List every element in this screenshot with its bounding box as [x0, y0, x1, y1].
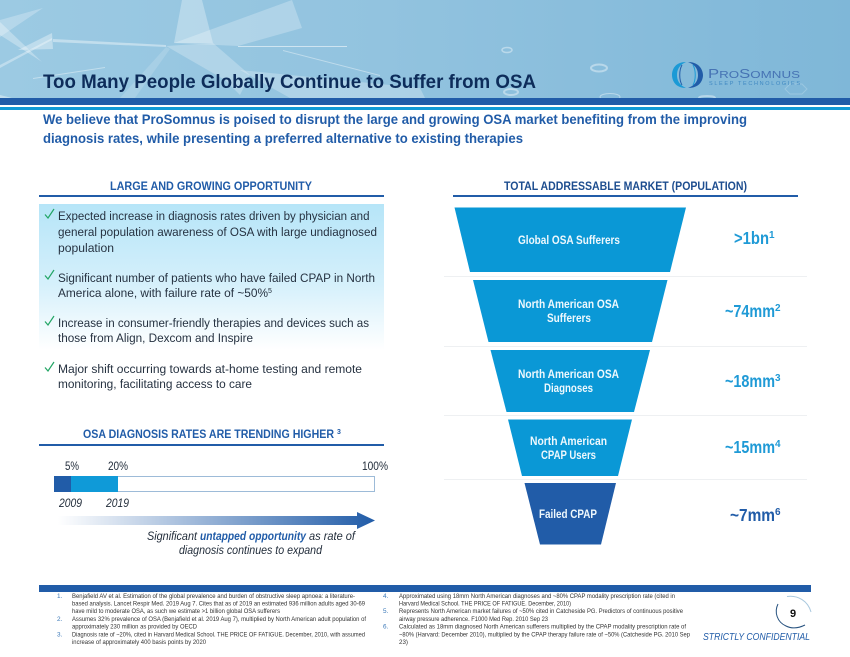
- footnotes: left column: 3.: [57, 632, 63, 638]
- funnel tier: failed CPAP: [524, 483, 616, 544]
- bullet 1: population: [58, 241, 114, 255]
- footnotes: right column: 5.: [383, 608, 389, 615]
- bullet 2: 5: [268, 288, 272, 295]
- bullet 3: Increase in consumer-friendly therapies and devices such as: [58, 316, 369, 330]
- caption: Significant: [147, 531, 198, 543]
- footnotes: right column: Represents North American market failures of ~50% cited in Catcheside PG. Predictors of continuous positive: [399, 608, 683, 615]
- funnel tier: global: Global OSA Sufferers: [518, 235, 620, 247]
- year labels: [58, 496, 129, 510]
- value: North American sufferers: 2: [775, 303, 781, 314]
- footnotes: left column: 2.: [57, 616, 63, 623]
- bullet 2: Significant number of patients who have failed CPAP in North: [58, 271, 375, 285]
- funnel tier: North American sufferers: [473, 280, 668, 342]
- logo: SLEEP TECHNOLOGIES: [709, 81, 800, 87]
- arrow: [58, 512, 375, 529]
- bullet 4: Major shift occurring towards at-home testing and remote: [58, 362, 362, 376]
- caption: diagnosis continues to expand: [179, 545, 323, 557]
- funnel tier: North American sufferers: North American OSA: [518, 299, 619, 311]
- section heading: diagnosis rates: 3: [337, 429, 341, 436]
- percent labels: [65, 459, 388, 473]
- value: failed CPAP: ~7mm: [730, 505, 775, 525]
- section heading: opportunity: LARGE AND GROWING OPPORTUNITY: [110, 179, 312, 193]
- funnel tier: diagnoses: North American OSA: [518, 369, 619, 381]
- percent labels: 20%: [108, 459, 128, 473]
- footnotes: left column: 1.: [57, 593, 63, 600]
- value: North American sufferers: ~74mm: [725, 301, 775, 321]
- value: global: >1bn: [734, 228, 769, 248]
- funnel tier: failed CPAP: Failed CPAP: [539, 509, 597, 521]
- footnotes: right column: 4.: [383, 593, 389, 600]
- footnotes: right column: Harvard Medical School. THE PRICE OF FATIGUE. December, 2010): [399, 600, 571, 608]
- page number badge: 9: [790, 608, 796, 620]
- logo: P RO S OMNUS: [708, 67, 800, 81]
- percent labels: 100%: [362, 459, 388, 473]
- footnotes: left column: have mild to moderate OSA, as such we estimate >1 billion global OSA sufferers: [72, 608, 280, 615]
- percent labels: 5%: [65, 459, 79, 473]
- value: diagnoses: ~18mm: [725, 371, 775, 391]
- footnotes: left column: Assumes 32% prevalence of OSA (Benjafield et al. 2019 Aug 7), multiplied by North American adult population of: [72, 616, 366, 623]
- footnotes: right column: airway pressure adherence. F1000 Med Rep. 2010 Sep 23: [399, 616, 548, 623]
- header banner: [0, 0, 850, 100]
- funnel tier: CPAP users: CPAP Users: [541, 450, 596, 462]
- panel: total addressable market funnel: [444, 179, 807, 544]
- year labels: 2019: [105, 496, 129, 510]
- caption: untapped opportunity: [200, 531, 307, 543]
- footnotes: left column: Benjafield AV et al. Estimation of the global prevalence and burden of obstructive sleep apnoea: a literature-: [72, 593, 355, 600]
- footer bar: [39, 585, 811, 592]
- footnotes: right column: [383, 593, 690, 646]
- subtitle: We believe that ProSomnus is poised to disrupt the large and growing OSA market benefiting from the improving: [43, 111, 747, 127]
- funnel tier: CPAP users: North American: [530, 436, 607, 448]
- footnotes: right column: Calculated as 18mm diagnosed North American sufferers multiplied by the CPAP modality prescription rate of: [399, 624, 686, 630]
- caption: [147, 531, 357, 557]
- footnotes: right column: ~80% (Harvard: December 2010), multiplied by the CPAP therapy failure rate of ~50% (Catcheside PG. 2010 Sep: [399, 632, 690, 638]
- year labels: 2009: [58, 496, 82, 510]
- funnel tier: CPAP users: [508, 420, 632, 476]
- funnel tier: diagnoses: Diagnoses: [544, 383, 593, 395]
- caption: as rate of: [309, 531, 357, 543]
- funnel tier: diagnoses: [490, 350, 650, 412]
- bullet 4: monitoring, facilitating access to care: [58, 377, 252, 391]
- bullet 1: Expected increase in diagnosis rates driven by physician and: [58, 209, 370, 223]
- section heading: market: TOTAL ADDRESSABLE MARKET (POPULATION): [504, 179, 747, 193]
- footnotes: right column: 23): [399, 639, 408, 646]
- funnel tier: global: [454, 208, 686, 272]
- footnotes: right column: 6.: [383, 624, 389, 630]
- panel: diagnosis rates: [39, 427, 388, 557]
- value: CPAP users: 4: [775, 439, 781, 450]
- funnel tier: North American sufferers: Sufferers: [547, 313, 591, 325]
- footnotes: left column: approximately 230 million as provided by OECD: [72, 624, 197, 630]
- title: Too Many People Globally Continue to Suffer from OSA: [43, 71, 536, 93]
- bullet 1: [45, 209, 377, 255]
- footnotes: left column: based analysis. Lancet Respir Med. 2019 Aug 7. Cites that as of 2019 an estimated 936 million adults aged 30-69: [72, 600, 365, 608]
- progress bar: [54, 476, 374, 492]
- logo: [672, 62, 800, 88]
- footnotes: left column: Diagnosis rate of ~20%, cited in Harvard Medical School. THE PRICE OF FATIGUE. December, 2010, with assumed: [72, 632, 365, 638]
- header rule: [0, 98, 850, 110]
- value: global: 1: [769, 230, 775, 241]
- panel: large and growing opportunity: [39, 179, 384, 391]
- subtitle: diagnosis rates, while presenting a preferred alternative to existing therapies: [43, 130, 523, 146]
- subtitle: [43, 111, 747, 146]
- bullet 3: those from Align, Dexcom and Inspire: [58, 331, 253, 345]
- confidentiality note: STRICTLY CONFIDENTIAL: [703, 631, 810, 643]
- bullet 2: America alone, with failure rate of ~50%: [58, 286, 268, 300]
- section heading: diagnosis rates: OSA DIAGNOSIS RATES ARE TRENDING HIGHER: [83, 427, 334, 441]
- value: diagnoses: 3: [775, 373, 781, 384]
- footnotes: right column: Approximated using 18mm North American diagnoses and ~80% CPAP modality prescription rate (cited in: [399, 593, 675, 600]
- page number badge: [776, 596, 811, 628]
- bullet 2: [45, 270, 375, 300]
- bullet 4: [45, 362, 362, 391]
- footnotes: left column: increase of approximately 400 basis points by 2020: [72, 639, 206, 646]
- footnotes: left column: [57, 593, 366, 646]
- value: CPAP users: ~15mm: [725, 437, 775, 457]
- bullet 3: [45, 316, 369, 345]
- bullet 1: general population awareness of OSA with large undiagnosed: [58, 225, 377, 239]
- value: failed CPAP: 6: [775, 507, 781, 518]
